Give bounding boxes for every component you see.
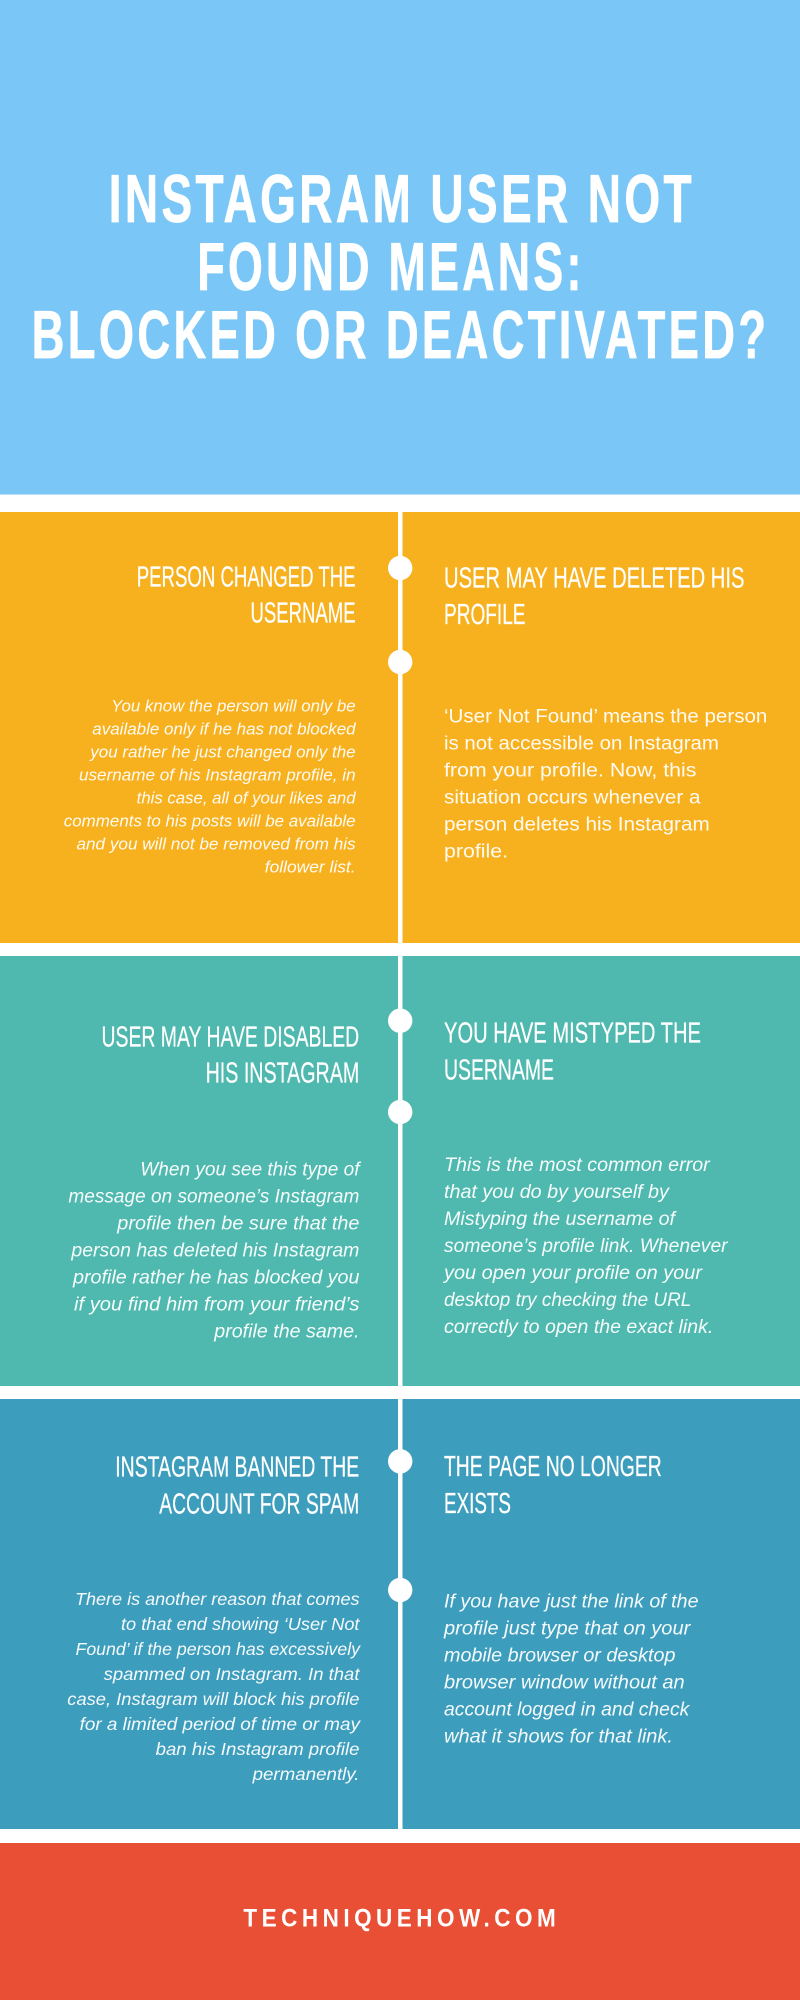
text block: person changed the username: You know the person will only be (111, 698, 356, 716)
text block: the page no longer exists: mobile browser or desktop (444, 1646, 676, 1667)
text block: you have mistyped the username (442, 1155, 728, 1338)
text block: user may have disabled his instagram: profile then be sure that the (116, 1213, 360, 1234)
text block: instagram banned the account for spam (67, 1589, 361, 1784)
text block: instagram banned the account for spam: for a limited period of time or may (80, 1714, 361, 1734)
text block: you have mistyped the username: correctly to open the exact link. (444, 1317, 713, 1338)
heading: the page no longer exists: THE PAGE NO LONGER (444, 1451, 662, 1483)
text block: the page no longer exists: If you have just the link of the (444, 1592, 698, 1613)
text block: person changed the username: and you will not be removed from his (76, 836, 356, 854)
text block: the page no longer exists: account logged in and check (444, 1700, 691, 1721)
heading: instagram banned the account for spam: ACCOUNT FOR SPAM (159, 1489, 359, 1521)
text block: instagram banned the account for spam: spammed on Instagram. In that (104, 1664, 361, 1684)
heading: user may have disabled his instagram: HIS INSTAGRAM (206, 1058, 359, 1090)
text block: user may have deleted his profile: situation occurs whenever a (444, 788, 701, 809)
panel: teal section (0, 956, 800, 1386)
heading: person changed the username: USERNAME (250, 598, 356, 630)
heading: user may have deleted his profile (444, 563, 744, 631)
text block: user may have deleted his profile: ‘User Not Found’ means the person (444, 707, 767, 728)
heading: you have mistyped the username (444, 1017, 701, 1086)
heading: instagram banned the account for spam: INSTAGRAM BANNED THE (115, 1452, 359, 1484)
text block: person changed the username: username of his Instagram profile, in (79, 767, 356, 785)
panel: footer (0, 1843, 800, 2000)
text block: person changed the username: you rather he just changed only the (89, 744, 356, 762)
text block: person changed the username: this case, all of your likes and (137, 790, 357, 808)
text block: you have mistyped the username: Mistyping the username of (444, 1209, 677, 1230)
text block: person changed the username (64, 698, 357, 877)
panel: title header (0, 0, 800, 494)
text block: user may have disabled his instagram: profile rather he has blocked you (72, 1267, 360, 1288)
heading: user may have disabled his instagram (102, 1022, 359, 1090)
text block: you have mistyped the username: desktop try checking the URL (444, 1290, 691, 1311)
text block: user may have deleted his profile: is not accessible on Instagram (444, 734, 719, 755)
heading: the page no longer exists: EXISTS (444, 1488, 511, 1520)
text block: user may have disabled his instagram: When you see this type of (140, 1159, 361, 1180)
text block: instagram banned the account for spam: ban his Instagram profile (156, 1739, 360, 1759)
text block: user may have deleted his profile: profile. (444, 842, 508, 863)
text block: person changed the username: comments to his posts will be available (64, 813, 356, 831)
text block: instagram banned the account for spam: There is another reason that comes (75, 1589, 360, 1609)
text block: person changed the username: follower list. (265, 859, 356, 877)
text block: the page no longer exists: profile just type that on your (443, 1619, 691, 1640)
title (32, 161, 769, 373)
text block: user may have disabled his instagram: person has deleted his Instagram (70, 1240, 359, 1261)
panel: yellow section (0, 512, 800, 943)
text block: you have mistyped the username: you open your profile on your (442, 1263, 703, 1284)
heading: you have mistyped the username: USERNAME (444, 1054, 554, 1086)
text block: instagram banned the account for spam: case, Instagram will block his profile (67, 1689, 360, 1709)
heading: person changed the username (137, 562, 356, 630)
text block: instagram banned the account for spam: to that end showing ‘User Not (121, 1614, 361, 1634)
text block: you have mistyped the username: that you do by yourself by (444, 1182, 670, 1203)
heading: the page no longer exists (444, 1451, 662, 1520)
text block: you have mistyped the username: someone’s profile link. Whenever (444, 1236, 728, 1257)
text block: instagram banned the account for spam: permanently. (252, 1764, 360, 1784)
text block: user may have deleted his profile: person deletes his Instagram (444, 815, 710, 836)
text block: user may have disabled his instagram: profile the same. (213, 1321, 360, 1342)
title: FOUND MEANS: (197, 229, 585, 305)
heading: person changed the username: PERSON CHANGED THE (137, 562, 356, 594)
heading: instagram banned the account for spam (115, 1452, 359, 1521)
text block: user may have disabled his instagram: message on someone’s Instagram (68, 1186, 359, 1207)
panel: blue section (0, 1399, 800, 1829)
timeline: divider with circular nodes (388, 512, 412, 1829)
text block: user may have disabled his instagram: if you find him from your friend’s (74, 1294, 360, 1315)
text block: the page no longer exists: browser window without an (444, 1673, 685, 1694)
text block: user may have deleted his profile: from your profile. Now, this (444, 761, 696, 782)
heading: user may have disabled his instagram: USER MAY HAVE DISABLED (102, 1022, 359, 1054)
text block: the page no longer exists (443, 1592, 698, 1748)
heading: user may have deleted his profile: PROFILE (444, 599, 526, 631)
text block: instagram banned the account for spam: Found’ if the person has excessively (76, 1639, 361, 1659)
text block: the page no longer exists: what it shows for that link. (444, 1727, 673, 1748)
text block: you have mistyped the username: This is the most common error (444, 1155, 710, 1176)
text block: user may have deleted his profile (444, 707, 767, 863)
text block: person changed the username: available only if he has not blocked (92, 721, 357, 739)
footer website label: TECHNIQUEHOW.COM (243, 1905, 560, 1933)
text block: user may have disabled his instagram (68, 1159, 361, 1342)
